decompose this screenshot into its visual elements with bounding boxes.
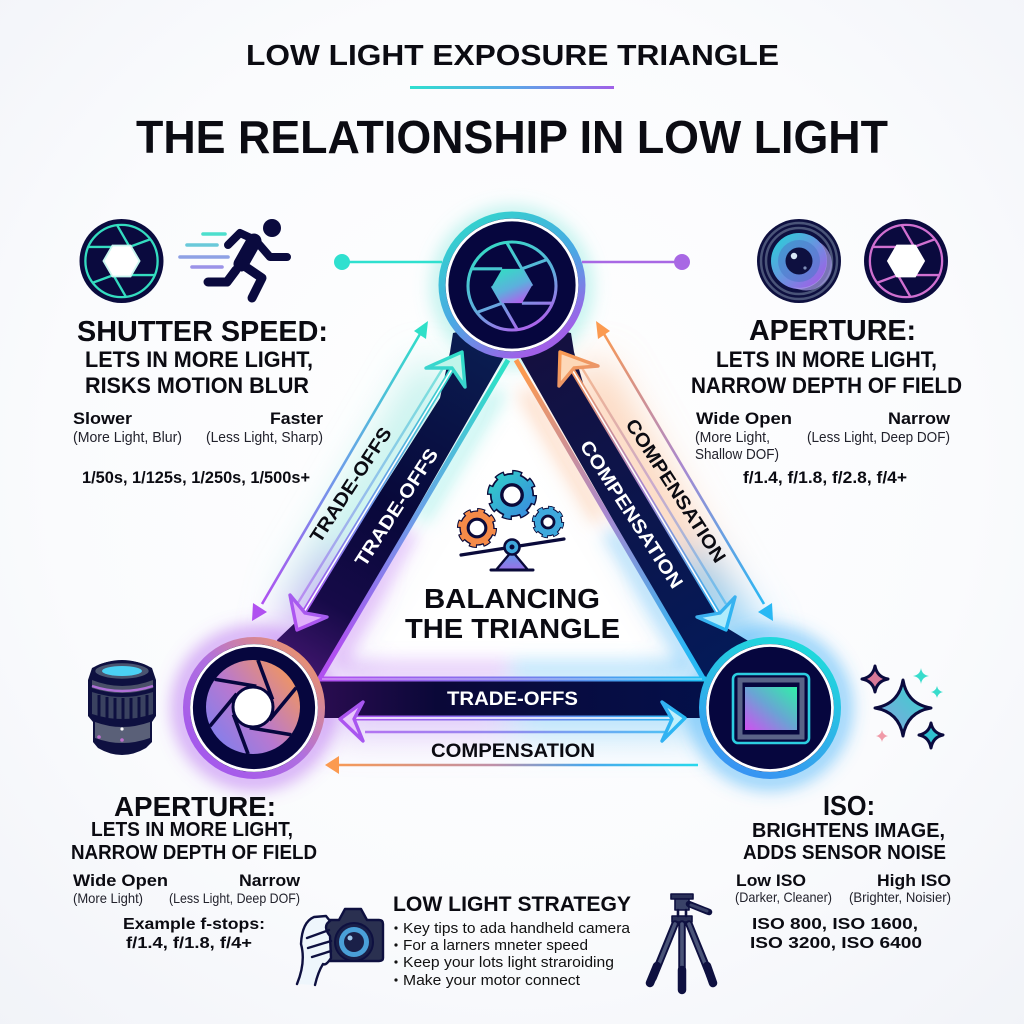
panel: aperture top right: NARROW DEPTH OF FIELD — [691, 373, 962, 398]
heading: SHUTTER SPEED: — [77, 316, 328, 348]
panel: aperture top right: Shallow DOF) — [695, 447, 779, 463]
halos around nodes — [181, 215, 843, 781]
panel: aperture bottom left: f/1.4, f/1.8, f/4+ — [126, 935, 252, 952]
title: LOW LIGHT EXPOSURE TRIANGLE — [246, 40, 779, 72]
tips list — [394, 920, 631, 989]
connector: left dot — [334, 254, 442, 270]
panel: shutter speed: (Less Light, Sharp) — [206, 430, 323, 446]
connector: right dot — [582, 254, 690, 270]
narrow: Narrow — [239, 871, 301, 890]
panel: ISO — [735, 790, 951, 952]
panel: aperture top right: (Less Light, Deep DOF) — [807, 430, 950, 446]
ISO values: ISO 800, ISO 1600, — [752, 916, 918, 933]
icon: balancing gears and seesaw — [459, 473, 564, 570]
low ISO: Low ISO — [736, 871, 806, 890]
panel: low light strategy — [393, 893, 631, 989]
panel: ISO: ADDS SENSOR NOISE — [743, 842, 946, 864]
dark band: left side — [277, 320, 512, 682]
wide open: Wide Open — [696, 409, 792, 428]
band label: trade-offs bottom: TRADE-OFFS — [447, 689, 578, 710]
heading: ISO: — [823, 790, 875, 821]
dark band: right side — [512, 320, 750, 678]
description: LETS IN MORE LIGHT, — [716, 347, 937, 372]
panel: aperture bottom left: (More Light) — [73, 890, 143, 906]
arrow: outer left two-headed — [252, 321, 428, 621]
tips list: Keep your lots light straroiding — [403, 954, 614, 971]
heading: APERTURE: — [114, 791, 276, 822]
faster: Faster — [270, 409, 323, 428]
band label: compensation inner right: COMPENSATION — [575, 437, 686, 593]
panel: ISO: ISO 3200, ISO 6400 — [750, 935, 922, 952]
arrow: bottom double arrow — [340, 702, 685, 741]
inner triangle glow — [372, 440, 654, 668]
arrow: right band double arrow — [559, 352, 735, 630]
panel: aperture top right — [691, 315, 962, 487]
f-stops: f/1.4, f/1.8, f/2.8, f/4+ — [743, 468, 907, 487]
speed values: 1/50s, 1/125s, 1/250s, 1/500s+ — [82, 468, 310, 487]
narrow: Narrow — [888, 409, 951, 428]
soft glow behind triangle — [290, 370, 750, 710]
slower: Slower — [73, 409, 132, 428]
center label — [405, 583, 620, 644]
heading: LOW LIGHT STRATEGY — [393, 893, 631, 916]
example f-stops: Example f-stops: — [123, 916, 265, 933]
panel: shutter speed: RISKS MOTION BLUR — [85, 373, 309, 398]
tips list: Key tips to ada handheld camera — [403, 920, 631, 937]
node: right sensor circle — [702, 640, 838, 776]
panel: aperture bottom left — [71, 791, 317, 952]
band label: trade-offs outer left: TRADE-OFFS — [307, 424, 397, 547]
panel: aperture bottom left: (Less Light, Deep DOF) — [169, 890, 300, 906]
tips list: For a larners mneter speed — [403, 937, 588, 954]
wide open: Wide Open — [73, 871, 168, 890]
band label: compensation bottom: COMPENSATION — [431, 741, 595, 762]
icon: small shutter teal — [80, 219, 164, 303]
icon: tripod — [650, 894, 713, 990]
inner edge: right — [516, 360, 703, 678]
icon: seesaw — [461, 539, 564, 570]
description: BRIGHTENS IMAGE, — [752, 820, 945, 842]
panel: aperture bottom left: NARROW DEPTH OF FIELD — [71, 842, 317, 864]
panel: aperture top right: (More Light, — [695, 430, 770, 446]
icon: camera lens front — [757, 219, 841, 303]
icon: large gear — [490, 473, 534, 517]
inner edge: left — [320, 360, 508, 678]
band label: compensation outer right: COMPENSATION — [621, 415, 729, 567]
main heading: THE RELATIONSHIP IN LOW LIGHT — [136, 111, 888, 163]
icon: orange gear — [459, 510, 495, 546]
node: top shutter circle — [442, 215, 582, 355]
triangle diagram — [181, 215, 843, 781]
high ISO: High ISO — [877, 871, 951, 890]
inner edge: bottom — [318, 676, 706, 682]
center label: THE TRIANGLE — [405, 613, 620, 644]
icon: small gear — [534, 508, 562, 536]
arrow: outer right two-headed — [596, 321, 773, 621]
band label: trade-offs inner left: TRADE-OFFS — [351, 445, 443, 571]
description: LETS IN MORE LIGHT, — [85, 347, 313, 372]
panel: shutter speed: (More Light, Blur) — [73, 430, 182, 446]
tips list: Make your motor connect — [403, 972, 581, 989]
panel: shutter speed — [73, 316, 328, 487]
heading: APERTURE: — [749, 315, 916, 347]
node: left aperture circle — [186, 640, 322, 776]
icon: hand holding camera — [297, 909, 383, 985]
panel: ISO: (Darker, Cleaner) — [735, 889, 832, 905]
panel: ISO: (Brighter, Noisier) — [849, 889, 951, 905]
icon: running figure — [180, 219, 287, 298]
icon: small shutter purple — [864, 219, 948, 303]
icon: lens barrel — [88, 660, 156, 755]
description: LETS IN MORE LIGHT, — [91, 819, 293, 841]
center label: BALANCING — [424, 583, 600, 614]
arrow: compensation — [325, 756, 698, 774]
dark band: bottom side — [300, 680, 720, 718]
arrow: left band double arrow — [290, 352, 465, 630]
inner edge glows — [335, 390, 690, 668]
icon: sparkles — [862, 666, 943, 748]
